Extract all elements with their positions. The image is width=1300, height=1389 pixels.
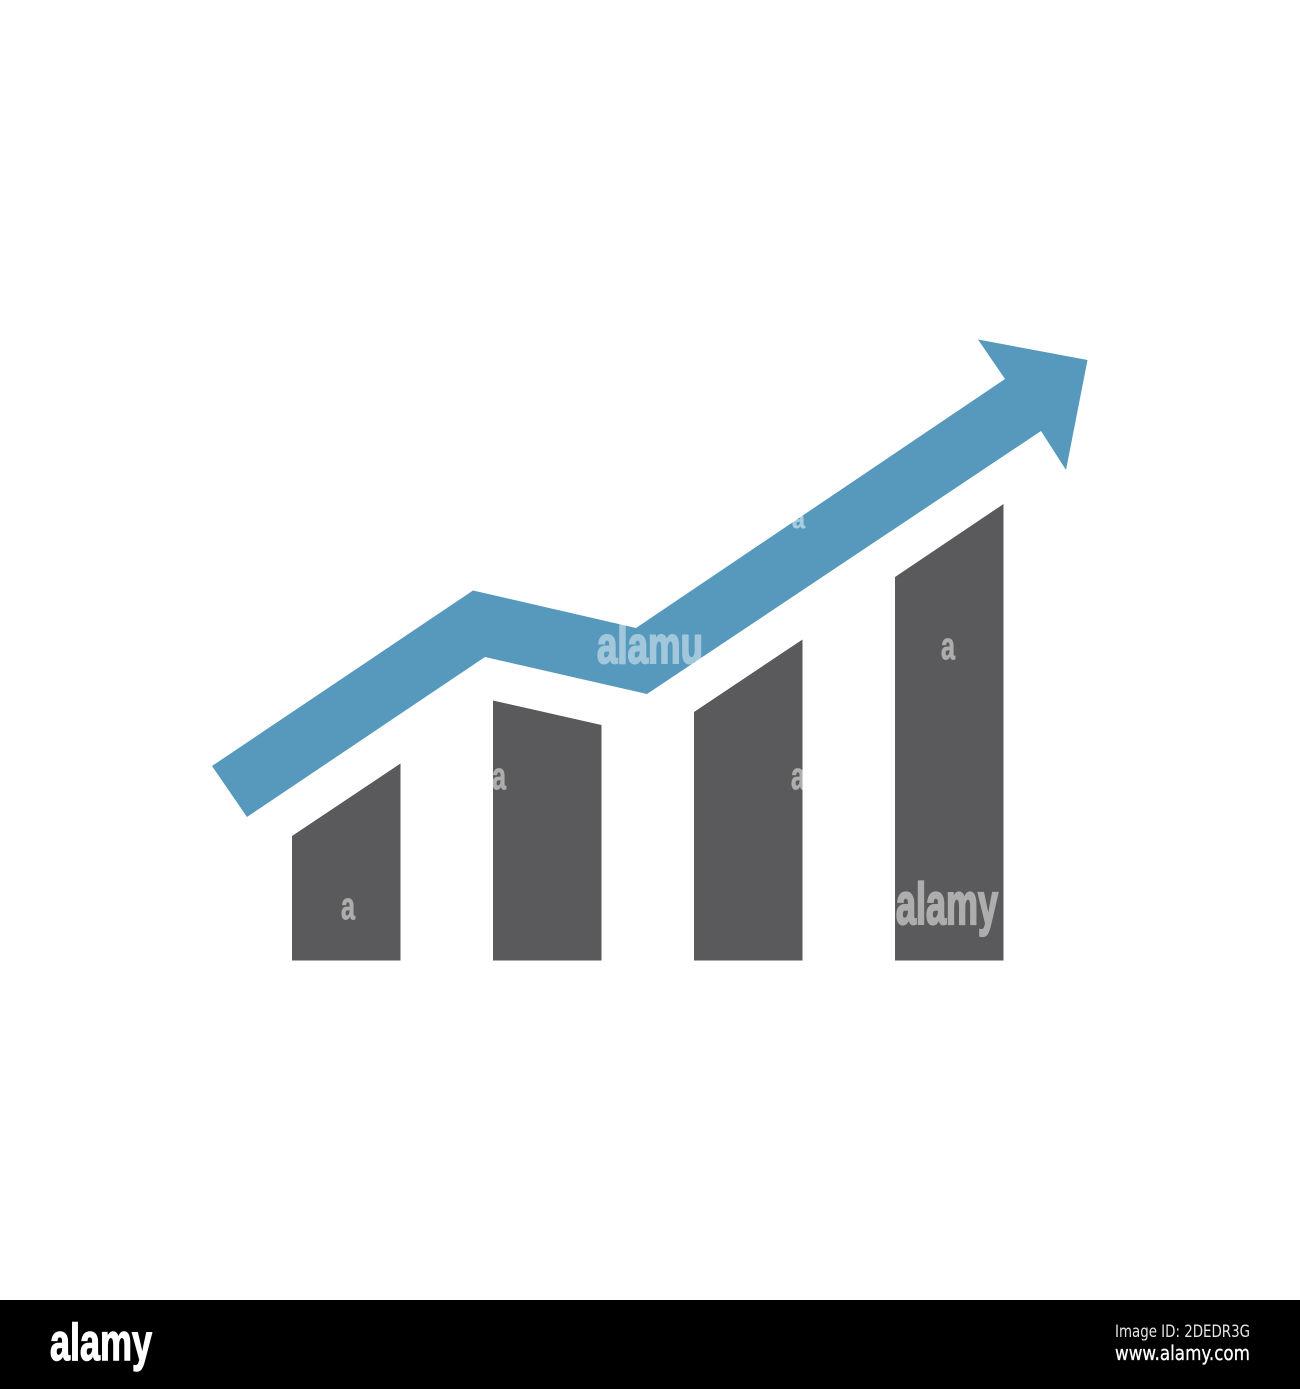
watermark: alamy on arrow: alamu — [597, 617, 703, 675]
footer logo: alamy — [50, 1314, 152, 1372]
watermark: small a on bar 3: a — [791, 756, 806, 798]
watermark: alamy on bar 4: alamy — [896, 872, 998, 937]
bar 1 — [292, 764, 400, 960]
image id: Image ID: 2DEDR3G — [1115, 1322, 1250, 1342]
bar 4 — [895, 504, 1004, 960]
watermark: small a on bar 4 upper: a — [941, 626, 956, 668]
watermark: small a on bar 1: a — [341, 886, 356, 928]
website: www.alamy.com — [1115, 1341, 1250, 1365]
bar 3 — [694, 640, 802, 960]
bar 2 — [493, 700, 602, 960]
watermark: small a on bar 2: a — [492, 756, 507, 798]
arrow: rising trend line — [212, 340, 1088, 817]
bar chart — [292, 504, 1004, 960]
footer bar — [0, 1300, 1300, 1389]
watermarks — [341, 504, 998, 937]
watermark: small a on arrow: a — [792, 504, 805, 534]
